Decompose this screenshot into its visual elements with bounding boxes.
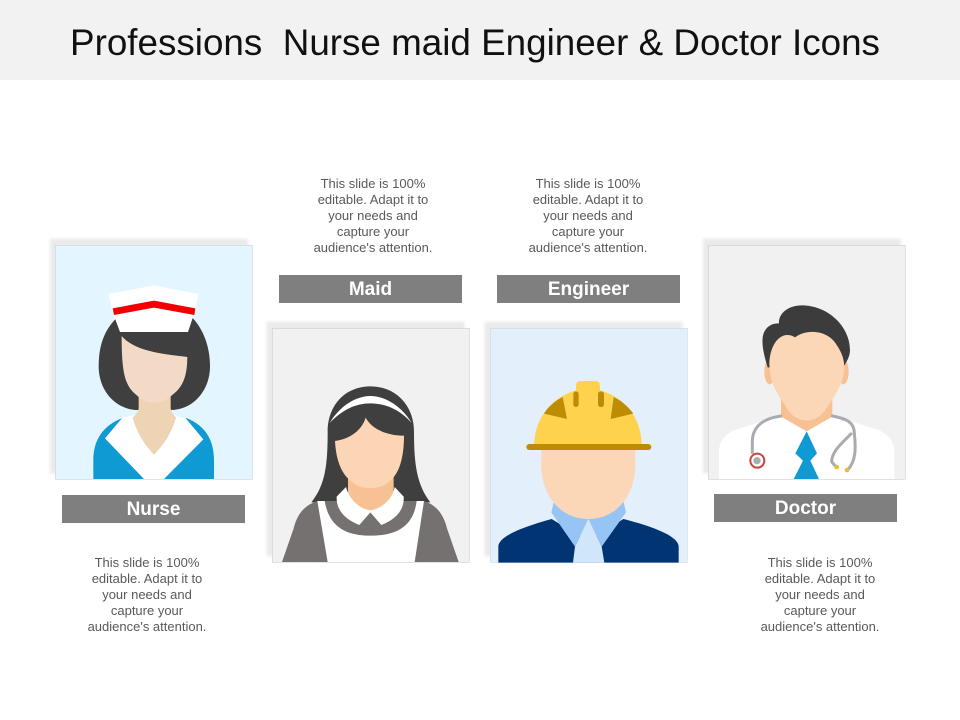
icon: doctor tie <box>794 431 819 479</box>
text block: maid description: capture your <box>337 224 409 239</box>
icon: maid collar <box>337 487 404 525</box>
heading: maid: Maid <box>349 279 392 300</box>
text block: nurse description <box>88 555 206 634</box>
text block: maid description <box>314 176 432 255</box>
text block: doctor description: editable. Adapt it to <box>765 571 875 586</box>
text block: maid description: editable. Adapt it to <box>318 192 428 207</box>
icon: doctor face <box>769 332 844 420</box>
heading: engineer: Engineer <box>548 279 629 300</box>
panel: maid portrait <box>267 322 469 562</box>
panel: doctor portrait <box>703 239 905 479</box>
heading: nurse <box>62 495 245 523</box>
icon: nurse cap red stripe <box>113 301 195 315</box>
icon: nurse collar <box>105 415 203 479</box>
icon: engineer helmet vents <box>544 397 633 419</box>
icon: nurse neck <box>133 393 176 455</box>
icon: doctor ears <box>764 359 775 384</box>
text block: maid description: This slide is 100% <box>321 176 425 191</box>
icon: nurse hair <box>99 316 210 410</box>
icon: doctor hair <box>762 305 850 370</box>
text block: maid description: your needs and <box>328 208 418 223</box>
icon: engineer face <box>541 448 635 519</box>
icon: maid face <box>335 418 404 488</box>
icon: engineer suit <box>498 519 679 563</box>
icon: nurse fringe <box>118 327 190 357</box>
icon: engineer tie <box>573 519 604 563</box>
text block: nurse description: This slide is 100% <box>95 555 199 570</box>
text block: nurse description: editable. Adapt it to <box>92 571 202 586</box>
heading: nurse: Nurse <box>127 499 180 520</box>
text block: engineer description: your needs and <box>543 208 633 223</box>
heading: engineer <box>497 275 680 303</box>
text block: doctor description: audience's attention. <box>761 619 879 634</box>
title: Professions Nurse maid Engineer & Doctor Icons <box>70 22 880 63</box>
header band with title <box>0 0 960 80</box>
icon: engineer helmet <box>534 381 642 446</box>
heading: maid <box>279 275 462 303</box>
panel: engineer portrait <box>485 322 687 563</box>
text block: doctor description: your needs and <box>775 587 865 602</box>
icon: maid apron <box>317 501 424 562</box>
text block: doctor description: capture your <box>784 603 856 618</box>
icon: engineer collar <box>551 501 626 547</box>
text block: engineer description: audience's attention. <box>529 240 647 255</box>
text block: nurse description: your needs and <box>102 587 192 602</box>
text block: nurse description: audience's attention. <box>88 619 206 634</box>
heading: doctor <box>714 494 897 522</box>
icon: maid dress <box>282 501 459 562</box>
icon: doctor neck <box>781 397 832 431</box>
icon: nurse face <box>122 335 187 403</box>
text block: engineer description <box>529 176 647 255</box>
text block: engineer description: capture your <box>552 224 624 239</box>
icon: maid hair <box>311 386 430 502</box>
icon: engineer helmet brim <box>526 444 651 450</box>
text block: doctor description <box>761 555 879 634</box>
icon: maid headband <box>330 396 412 423</box>
icon: doctor stethoscope <box>752 416 855 470</box>
icon: maid neck <box>348 472 394 512</box>
text block: maid description: audience's attention. <box>314 240 432 255</box>
panel: nurse portrait <box>50 239 252 479</box>
icon: nurse cap <box>108 285 199 332</box>
text block: nurse description: capture your <box>111 603 183 618</box>
icon: doctor coat <box>719 415 894 479</box>
icon: nurse uniform <box>93 418 214 479</box>
text block: engineer description: editable. Adapt it to <box>533 192 643 207</box>
heading: doctor: Doctor <box>775 498 836 519</box>
text block: engineer description: This slide is 100% <box>536 176 640 191</box>
text block: doctor description: This slide is 100% <box>768 555 872 570</box>
